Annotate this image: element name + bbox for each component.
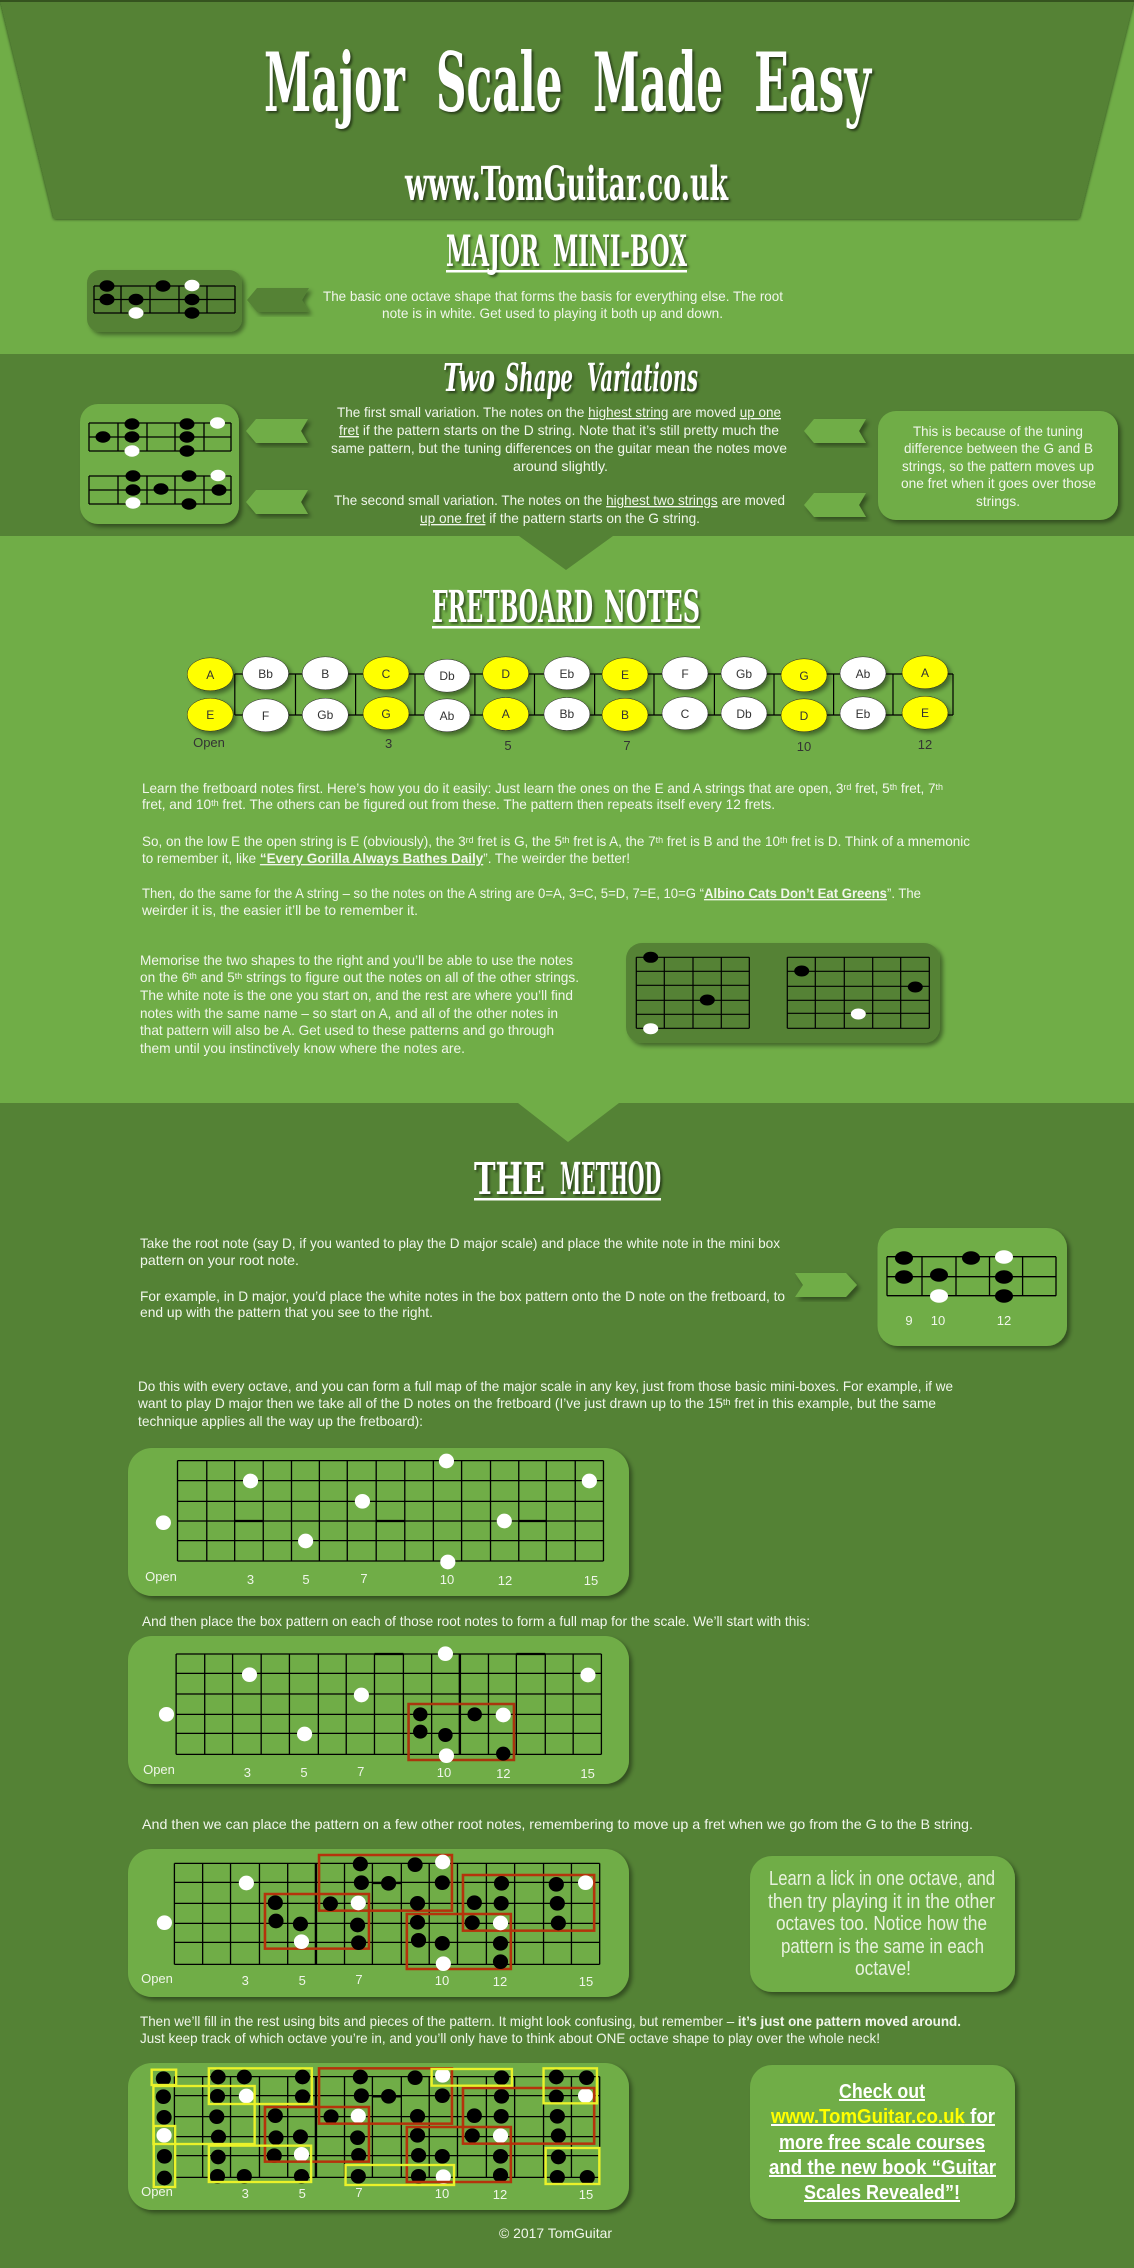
- panel: several boxes on fretboard: 5: [299, 1973, 306, 1988]
- text: variation descriptions: up one fret if the pattern starts on the G string.: [420, 511, 700, 526]
- title: Major: [264, 36, 406, 131]
- panel: first box on fretboard: 15: [580, 1766, 595, 1781]
- text: filling in the rest: [140, 2014, 961, 2046]
- background band: two shape variations: [0, 354, 1134, 536]
- text: fretboard notes explanation: fret, and 10th fret. The others can be figured out from these. The pattern then repeats itself every 12 frets.: [142, 797, 775, 812]
- text: fretboard notes explanation: Then, do the same for the A string – so the notes on the A string are 0=A, 3=C, 5=D, 7=E, 10=G “Albino Cats Don’t Eat Greens”. The: [142, 886, 921, 901]
- callout: tuning explanation: one fret when it goes over those: [901, 476, 1096, 491]
- panel: first box on fretboard: 7: [357, 1764, 364, 1779]
- panel: D root notes fretboard: 10: [440, 1572, 454, 1587]
- text: method introduction: For example, in D major, you’d place the white notes in the box pattern onto the D note on the fretboard, to: [140, 1289, 785, 1304]
- chart: fretboard note names: 3: [385, 736, 392, 751]
- callout: check out website: Scales Revealed”!: [804, 2182, 960, 2204]
- chart: fretboard note names: A: [502, 707, 510, 721]
- arrow: mini-box pointer: [247, 288, 309, 312]
- text: other root notes: And then we can place the pattern on a few other root notes, remembering to move up a fret when we go from the G to the B string.: [142, 1817, 973, 1832]
- panel: several boxes on fretboard: [128, 1849, 629, 1997]
- chart: fretboard note names: E: [921, 706, 929, 720]
- arrow: method pointer right: [795, 1273, 857, 1297]
- panel: several boxes on fretboard: 12: [493, 1974, 507, 1989]
- text: fretboard notes explanation: weirder it is, the easier it’ll be to remember it.: [141, 903, 418, 918]
- heading: the method: [474, 1154, 661, 1205]
- chart: fretboard note names: Open: [193, 735, 225, 750]
- chart: fretboard note names: 12: [918, 737, 932, 752]
- text: memorise the shapes: notes with the same name – so start on A, and all of the other notes in: [140, 1006, 558, 1021]
- panel: first box on fretboard: 12: [496, 1766, 511, 1781]
- callout: learn a lick: [750, 1856, 1015, 1992]
- callout: learn a lick: pattern is the same in each: [781, 1936, 984, 1958]
- chart: fretboard note names: B: [321, 667, 329, 681]
- text: filling in the rest: Then we’ll fill in the rest using bits and pieces of the pattern. It might look confusing, but remember – it’s just one pattern moved around.: [140, 2014, 961, 2029]
- chart: fretboard note names: Eb: [856, 707, 871, 721]
- text: fretboard notes explanation: to remember it, like “Every Gorilla Always Bathes Daily”. The weirder the better!: [142, 851, 630, 866]
- text: method introduction: pattern on your root note.: [140, 1253, 299, 1268]
- panel: D root notes fretboard: 3: [247, 1572, 254, 1587]
- callout: check out website: and the new book “Guitar: [769, 2157, 996, 2179]
- panel: D major box diagram: 10: [931, 1313, 945, 1328]
- text: method introduction: Take the root note (say D, if you wanted to play the D major scale) and place the white note in the mini box: [140, 1236, 780, 1251]
- panel: full scale map: [128, 2063, 629, 2210]
- chart: fretboard note names: C: [382, 667, 391, 681]
- panel: D root notes fretboard: Open: [145, 1569, 177, 1584]
- panel: full scale map: Open: [141, 2184, 173, 2199]
- panel: two variation diagrams: [80, 404, 239, 524]
- connector triangle above the method: [518, 1103, 619, 1142]
- callout: check out website: Check out: [839, 2081, 925, 2103]
- chart: fretboard note names: B: [621, 708, 629, 722]
- callout: learn a lick: then try playing it in the other: [768, 1891, 995, 1913]
- text: variation descriptions: The second small variation. The notes on the highest two strings are moved: [334, 493, 785, 508]
- arrow: first variation right: [804, 419, 866, 443]
- callout: tuning explanation: This is because of the tuning: [913, 424, 1083, 439]
- chart: fretboard note names: A: [206, 668, 214, 682]
- text: variation descriptions: The first small variation. The notes on the highest string are moved up one: [337, 405, 781, 420]
- callout: learn a lick: octave!: [855, 1958, 911, 1980]
- text: mini-box description: note is in white. Get used to playing it both up and down.: [382, 306, 723, 321]
- chart: fretboard note names: [187, 656, 953, 754]
- text: fretboard notes explanation: So, on the low E the open string is E (obviously), the 3rd fret is G, the 5th fret is A, the 7th fret is B and the 10th fret is D. Think of a mnemonic: [142, 834, 970, 849]
- panel: full scale map: 7: [355, 2185, 363, 2200]
- panel: D root notes fretboard: 15: [584, 1573, 598, 1588]
- infographic canvas: METHOD: [560, 1154, 661, 1205]
- panel: several boxes on fretboard: 15: [579, 1974, 593, 1989]
- text: memorise the shapes: The white note is the one you start on, and the rest are where you’ll find: [140, 988, 573, 1003]
- text: variation descriptions: [331, 405, 787, 526]
- chart: fretboard note names: F: [262, 709, 269, 723]
- text: mini-box description: The basic one octave shape that forms the basis for everything else. The root: [323, 289, 783, 304]
- panel: mini-box diagram: [87, 270, 242, 332]
- text: full map explanation: Do this with every octave, and you can form a full map of the major scale in any key, just from those basic mini-boxes. For example, if we: [138, 1379, 953, 1394]
- panel: full scale map: 10: [435, 2186, 449, 2201]
- chart: fretboard note names: F: [681, 667, 689, 681]
- title: Easy: [754, 36, 872, 131]
- text: placing the box pattern: And then place the box pattern on each of those root notes to form a full map for the scale. We’ll start with this:: [142, 1614, 810, 1629]
- panel: first box on fretboard: 5: [300, 1765, 308, 1780]
- callout: tuning explanation: [878, 411, 1118, 520]
- text: full map explanation: want to play D major then we take all of the D notes on the fretboard (I’ve just drawn up to the 15 th fret in this example, but the same: [137, 1396, 936, 1411]
- panel: first box on fretboard: 10: [437, 1765, 451, 1780]
- panel: full scale map: 5: [299, 2186, 306, 2201]
- callout: check out website: www.TomGuitar.co.uk for: [770, 2106, 995, 2128]
- title: Scale: [436, 36, 562, 131]
- panel: several boxes on fretboard: 7: [355, 1972, 363, 1987]
- text: full map explanation: technique applies all the way up the fretboard):: [138, 1414, 423, 1429]
- chart: fretboard note names: Gb: [736, 667, 752, 681]
- panel: D root notes fretboard: 7: [360, 1571, 368, 1586]
- panel: D root notes fretboard: 12: [498, 1573, 512, 1588]
- text: fretboard notes explanation: [141, 781, 970, 918]
- heading: two shape variations: Variations: [587, 355, 698, 400]
- panel: octave shape diagrams: [626, 943, 940, 1043]
- chart: fretboard note names: E: [621, 668, 629, 682]
- chart: fretboard note names: C: [681, 707, 690, 721]
- title: Made: [593, 36, 723, 131]
- heading: two shape variations: Two: [443, 355, 495, 400]
- chart: fretboard note names: D: [800, 709, 809, 723]
- heading: major mini-box: MINI-BOX: [553, 227, 687, 277]
- chart: fretboard note names: A: [921, 666, 929, 680]
- heading: the method: THE: [474, 1154, 545, 1205]
- callout: tuning explanation: strings.: [976, 494, 1020, 509]
- panel: first box on fretboard: [128, 1636, 629, 1784]
- chart: fretboard note names: Db: [736, 707, 752, 721]
- arrow: second variation left: [246, 490, 308, 514]
- text: full map explanation: [137, 1379, 953, 1429]
- chart: fretboard note names: Gb: [317, 708, 334, 722]
- panel: D root notes fretboard: 5: [302, 1572, 310, 1587]
- arrow: first variation left: [246, 419, 308, 443]
- chart: fretboard note names: G: [799, 669, 809, 683]
- panel: full scale map: 12: [493, 2187, 507, 2202]
- heading: major mini-box: MAJOR: [446, 227, 539, 277]
- chart: fretboard note names: Ab: [440, 709, 455, 723]
- heading: two shape variations: [443, 355, 698, 400]
- text: copyright: © 2017 TomGuitar: [499, 2226, 612, 2241]
- panel: first box on fretboard: 3: [244, 1765, 251, 1780]
- panel: full scale map: 15: [579, 2187, 593, 2202]
- callout: tuning explanation: strings, so the pattern moves up: [902, 459, 1094, 474]
- heading: fretboard notes: FRETBOARD: [432, 582, 593, 633]
- chart: fretboard note names: 5: [504, 738, 512, 753]
- background section: the method: [0, 1103, 1134, 2268]
- text: memorise the shapes: that pattern will also be A. Get used to these patterns and go through: [140, 1023, 554, 1038]
- text: variation descriptions: same pattern, but the tuning differences on the guitar mean the notes move: [331, 441, 787, 456]
- text: memorise the shapes: [140, 953, 579, 1056]
- title: [264, 36, 872, 131]
- text: method introduction: [140, 1236, 785, 1320]
- panel: D major box diagram: 12: [997, 1313, 1011, 1328]
- chart: fretboard note names: Eb: [560, 667, 575, 681]
- text: variation descriptions: around slightly.: [513, 459, 608, 474]
- text: mini-box description: [323, 289, 783, 321]
- chart: fretboard note names: Bb: [258, 667, 273, 681]
- heading: fretboard notes: NOTES: [604, 582, 700, 633]
- chart: fretboard note names: 7: [623, 738, 631, 753]
- panel: full scale map: 3: [242, 2186, 249, 2201]
- panel: D root notes fretboard: [128, 1448, 629, 1596]
- chart: fretboard note names: Ab: [856, 667, 871, 681]
- panel: D major box diagram: [878, 1228, 1067, 1346]
- connector triangle under variations band: [519, 536, 613, 570]
- text: memorise the shapes: Memorise the two shapes to the right and you’ll be able to use the notes: [140, 953, 573, 968]
- chart: fretboard note names: G: [381, 707, 391, 721]
- callout: learn a lick: Learn a lick in one octave, and: [769, 1868, 995, 1890]
- chart: fretboard note names: E: [206, 708, 214, 722]
- website url: www.TomGuitar.co.uk: [404, 157, 729, 212]
- callout: learn a lick: octaves too. Notice how the: [776, 1913, 987, 1935]
- header banner: [0, 0, 1134, 219]
- heading: two shape variations: Shape: [505, 355, 573, 400]
- callout: tuning explanation: difference between the G and B: [904, 441, 1093, 456]
- panel: several boxes on fretboard: 10: [435, 1973, 449, 1988]
- panel: first box on fretboard: Open: [143, 1762, 175, 1777]
- text: variation descriptions: fret if the pattern starts on the D string. Note that it’s still pretty much the: [339, 423, 779, 438]
- panel: several boxes on fretboard: 3: [242, 1973, 249, 1988]
- arrow: second variation right: [804, 493, 866, 517]
- callout: check out website: [750, 2065, 1015, 2219]
- chart: fretboard note names: D: [501, 667, 510, 681]
- panel: D major box diagram: 9: [905, 1313, 913, 1328]
- text: fretboard notes explanation: Learn the fretboard notes first. Here’s how you do it easily: Just learn the ones on the E and A strings that are open, 3rd fret, 5th fret, 7th: [142, 781, 943, 796]
- text: method introduction: end up with the pattern that you see to the right.: [140, 1305, 433, 1320]
- chart: fretboard note names: Db: [439, 669, 455, 683]
- chart: fretboard note names: 10: [797, 739, 811, 754]
- chart: fretboard note names: Bb: [560, 707, 575, 721]
- text: filling in the rest: Just keep track of which octave you’re in, and you’ll only have to think about ONE octave shape to play over the whole neck!: [140, 2031, 880, 2046]
- text: memorise the shapes: on the 6th and 5th strings to figure out the notes on all of the other strings.: [140, 970, 579, 985]
- callout: check out website: more free scale courses: [779, 2132, 985, 2154]
- text: memorise the shapes: them until you instinctively know where the notes are.: [140, 1041, 465, 1056]
- panel: several boxes on fretboard: Open: [141, 1971, 173, 1986]
